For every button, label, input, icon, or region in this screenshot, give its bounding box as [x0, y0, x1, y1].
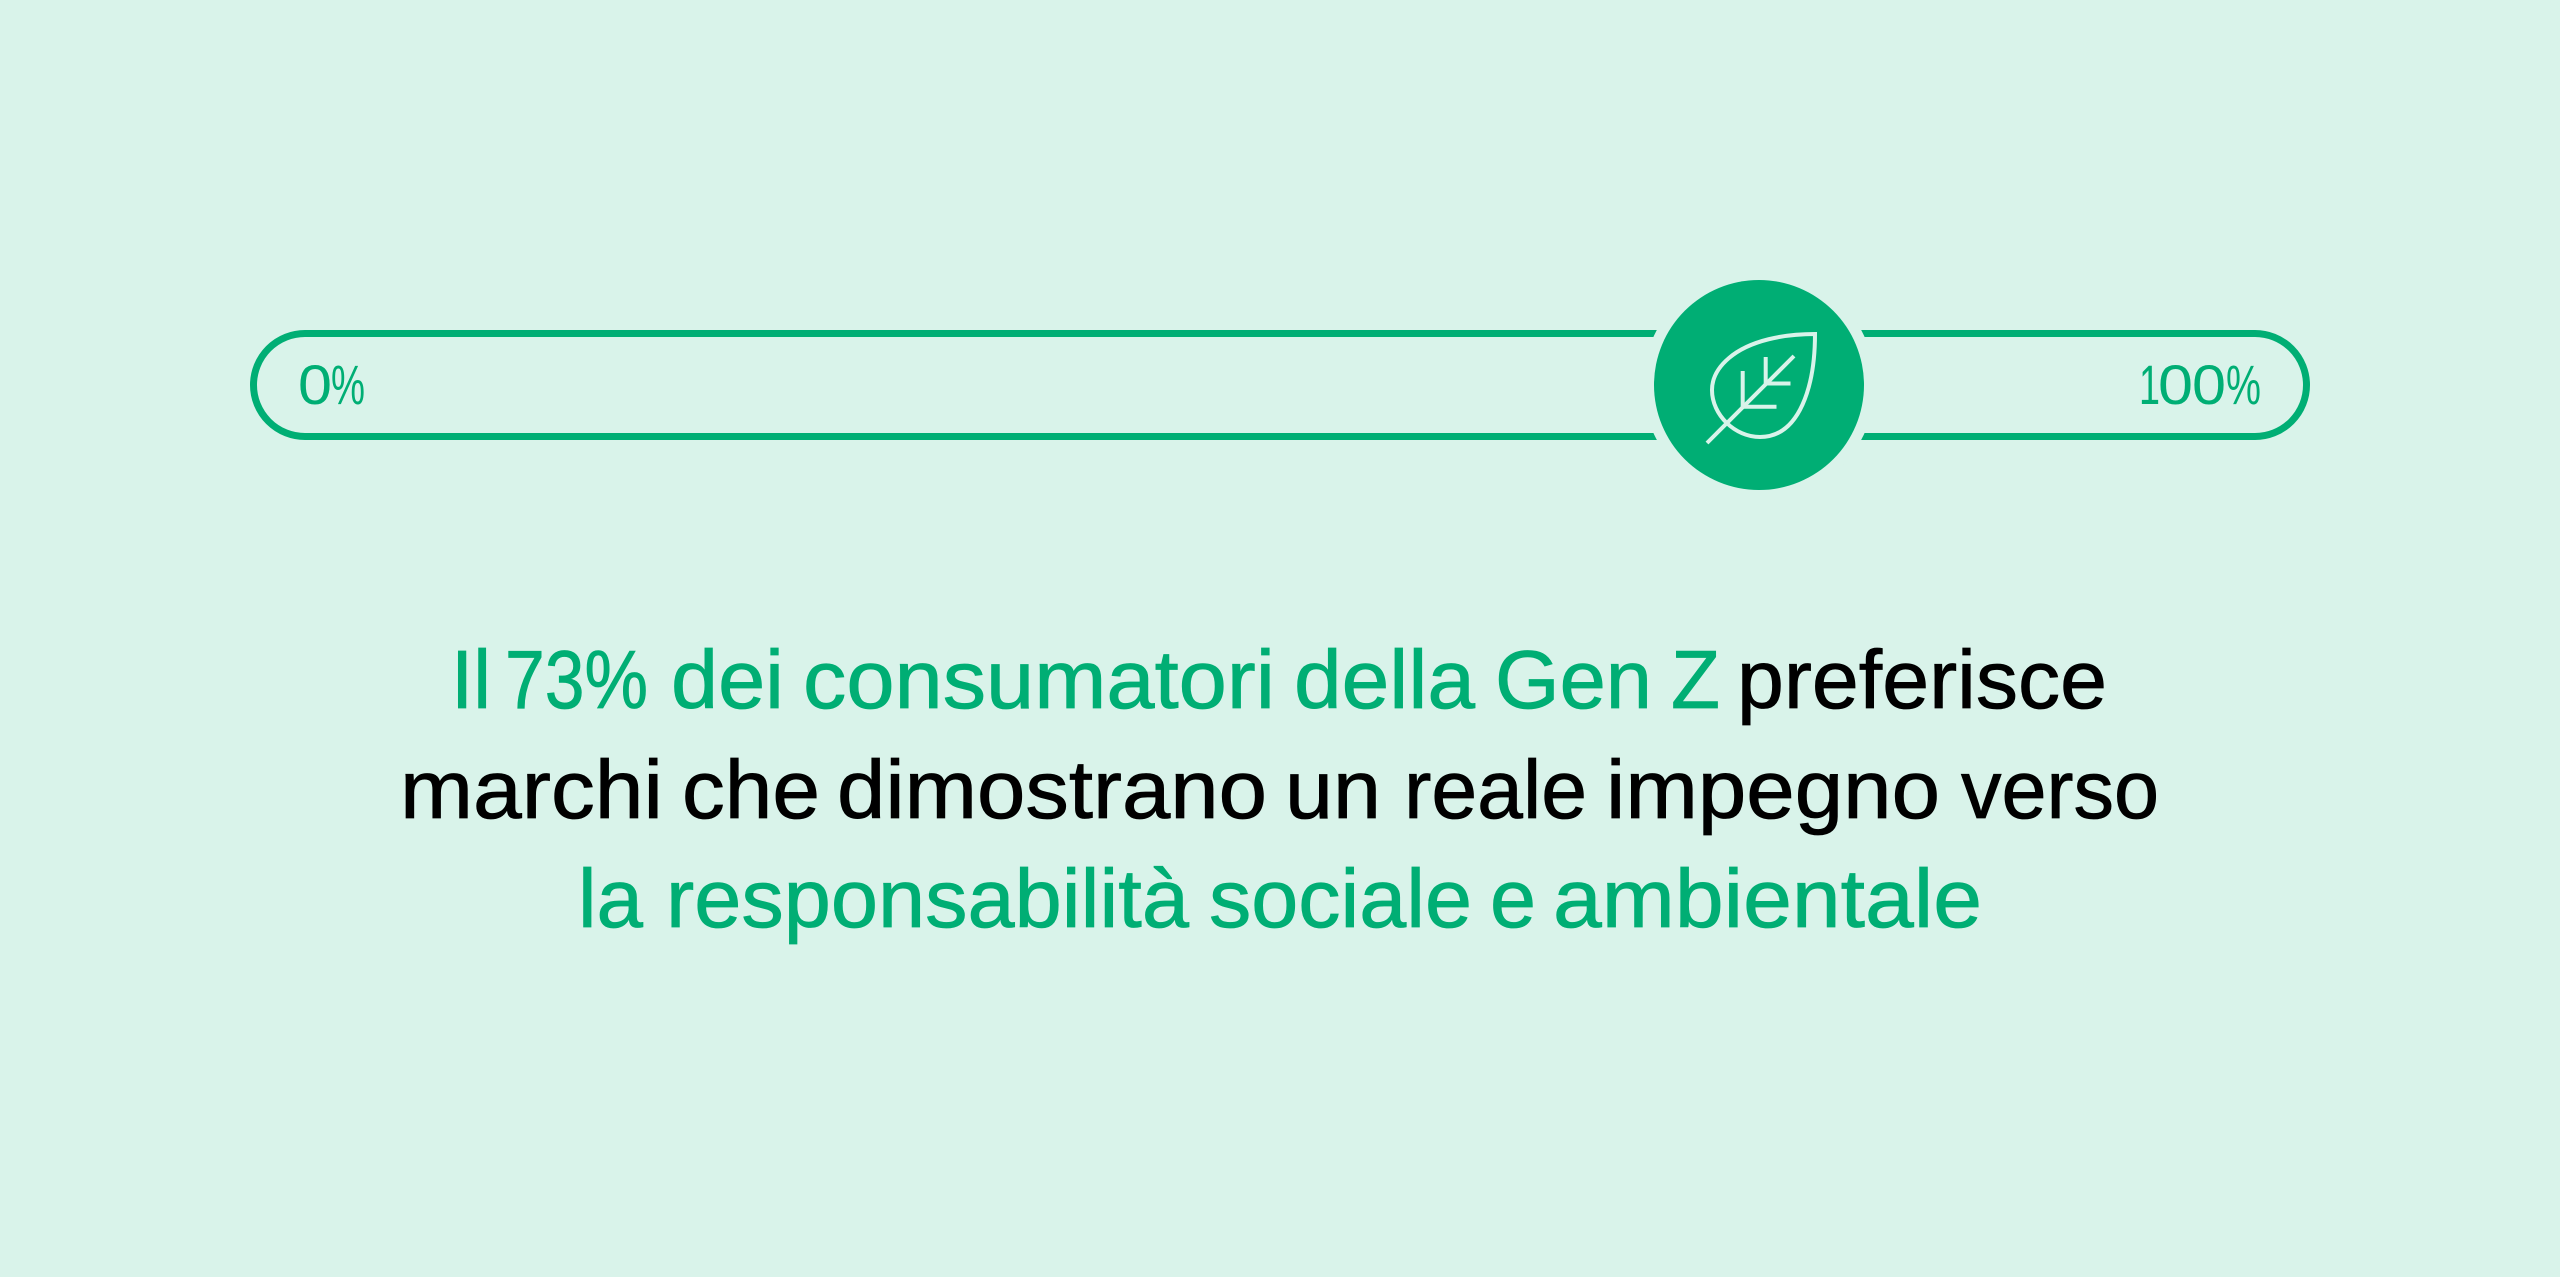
line 3 highlight: ambientale [1553, 852, 1982, 945]
label: 0%: % [331, 353, 365, 416]
line 1 black: preferisce [1737, 633, 2107, 726]
line 3 highlight: la [578, 852, 644, 945]
line 2 black: marchi [400, 743, 663, 836]
line 3 highlight: e [1490, 852, 1536, 945]
line 1 highlight [451, 633, 1720, 726]
line 1 highlight: Il [451, 633, 491, 726]
icon: leaf [1707, 334, 1815, 443]
line 1 highlight: Z [1671, 633, 1720, 726]
label: 100%: 1 [2139, 353, 2160, 416]
label: 100%: 0 [2192, 353, 2226, 416]
line 1 highlight: consumatori [803, 633, 1275, 726]
bar track [254, 334, 2306, 436]
label: 100%: % [2226, 353, 2261, 416]
line 3 highlight [578, 852, 1982, 945]
line 3 highlight: responsabilità [666, 852, 1190, 945]
line 2 black: che [682, 743, 820, 836]
line 3 highlight: sociale [1209, 852, 1472, 945]
line 1 highlight: Gen [1495, 633, 1652, 726]
progress bar [254, 269, 2306, 501]
line 1 highlight: 73% [505, 633, 648, 726]
line 2 black: impegno [1606, 743, 1940, 836]
line 2 black: un [1285, 743, 1381, 836]
line 2 black: reale [1404, 743, 1587, 836]
label: 100% [2139, 353, 2261, 416]
line 1 highlight: dei [671, 633, 784, 726]
label: 0%: 0 [298, 353, 332, 416]
bar marker circle [1654, 280, 1864, 490]
line 2 black [400, 743, 2159, 836]
label: 100%: 0 [2158, 353, 2193, 416]
label: 0% [298, 353, 365, 416]
line 2 black: verso [1961, 743, 2159, 836]
line 1 highlight: della [1294, 633, 1476, 726]
bar marker halo [1643, 269, 1875, 501]
line 2 black: dimostrano [837, 743, 1267, 836]
statement text [400, 633, 2159, 945]
